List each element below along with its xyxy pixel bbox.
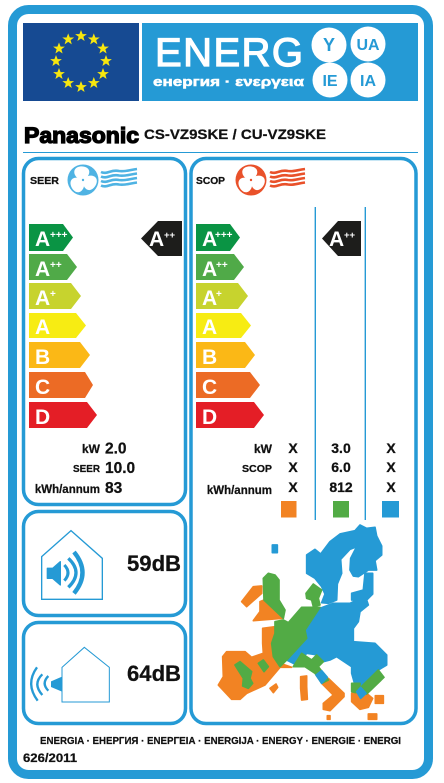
indoor sound level: 59dB [127, 551, 181, 576]
heating data table: X [288, 459, 298, 475]
D arrow: D [202, 406, 217, 429]
regulation number: 626/2011 [23, 751, 77, 765]
D arrow [29, 402, 97, 429]
heating data table: X [386, 440, 396, 456]
SEER label: SEER [30, 176, 60, 187]
rating indicator A++: A [329, 228, 344, 251]
language suffix circles: IE [322, 73, 338, 90]
icon: outdoor speaker house [31, 647, 109, 702]
rating indicator A++ [322, 221, 361, 256]
A arrow: A [202, 316, 217, 339]
language suffix circles: IA [360, 73, 376, 90]
A+++ arrow [29, 224, 73, 251]
C arrow: C [202, 376, 217, 399]
heating data table: 6.0 [331, 459, 351, 475]
language suffix circles: UA [356, 37, 380, 54]
A arrow [196, 313, 251, 339]
A+ arrow: A [202, 287, 217, 310]
A++ arrow: ++ [50, 260, 62, 271]
energy banner [142, 23, 418, 101]
A++ arrow [29, 254, 77, 281]
cooling data: SEER [73, 464, 101, 475]
D arrow [196, 402, 264, 429]
panel: outdoor noise [24, 622, 186, 724]
heating data table: X [288, 479, 298, 495]
outdoor sound level: 64dB [127, 661, 181, 686]
A+ arrow [29, 283, 81, 310]
footer languages line: ENERGIA · ЕНЕРГИЯ · ΕΝΕΡΓΕΙΑ · ENERGIJA · ENERGY · ENERGIE · ENERGI [40, 736, 401, 747]
heating data table: 3.0 [331, 440, 351, 456]
A+ arrow: A [35, 287, 50, 310]
rating indicator A++ [141, 221, 182, 256]
heating data table: X [288, 440, 298, 456]
heating data table: SCOP [242, 464, 272, 475]
brand name: Panasonic [24, 123, 139, 148]
climate legend squares [281, 501, 399, 518]
heating data table: X [386, 479, 396, 495]
C arrow [29, 372, 93, 399]
heating data table [207, 440, 396, 497]
A+++ arrow: A [35, 228, 50, 251]
A+++ arrow [196, 224, 240, 251]
A++ arrow: ++ [216, 260, 228, 271]
C arrow [196, 372, 260, 399]
A arrow: A [35, 316, 50, 339]
D arrow: D [35, 406, 50, 429]
heating data table: kWh/annum [207, 485, 272, 497]
heating data table: 812 [329, 479, 353, 495]
B arrow: B [35, 346, 50, 369]
B arrow [29, 342, 90, 369]
panel: indoor noise [24, 512, 186, 616]
cooling data: kWh/annum [35, 484, 100, 496]
cooling data: 83 [105, 480, 123, 497]
A+ arrow: + [50, 289, 56, 300]
cooling data: kW [82, 442, 101, 456]
heating data table: kW [254, 442, 273, 456]
icon: indoor speaker house [42, 531, 102, 599]
A+++ arrow: +++ [50, 230, 68, 241]
A++ arrow: A [35, 258, 50, 281]
panel: cooling SEER [24, 158, 186, 504]
language suffix circles: Y [323, 35, 335, 55]
B arrow [196, 342, 255, 369]
icon: heating fan and air [236, 164, 305, 196]
model number: CS-VZ9SKE / CU-VZ9SKE [144, 127, 326, 142]
cooling data [35, 440, 135, 497]
panel: heating SCOP [191, 158, 416, 724]
climate map of Europe [218, 525, 387, 719]
cooling data: 10.0 [105, 460, 135, 477]
SCOP label: SCOP [196, 176, 225, 187]
rating indicator A++: ++ [344, 230, 356, 241]
EU flag [23, 23, 139, 101]
A arrow [29, 313, 86, 339]
A+++ arrow: +++ [215, 230, 233, 241]
heating data table: X [386, 459, 396, 475]
rating indicator A++: A [149, 228, 164, 251]
rating indicator A++: ++ [164, 230, 176, 241]
A++ arrow [196, 254, 244, 281]
A+ arrow [196, 283, 248, 310]
C arrow: C [35, 376, 50, 399]
language suffix circles [312, 26, 386, 98]
icon: cooling fan and air [68, 164, 137, 196]
A+ arrow: + [216, 289, 222, 300]
A+++ arrow: A [202, 228, 217, 251]
banner word ENERG: ENERG [155, 31, 303, 75]
banner subtitle: енергия · ενεργεια [153, 75, 304, 89]
A++ arrow: A [202, 258, 217, 281]
B arrow: B [202, 346, 217, 369]
cooling data: 2.0 [105, 440, 127, 458]
